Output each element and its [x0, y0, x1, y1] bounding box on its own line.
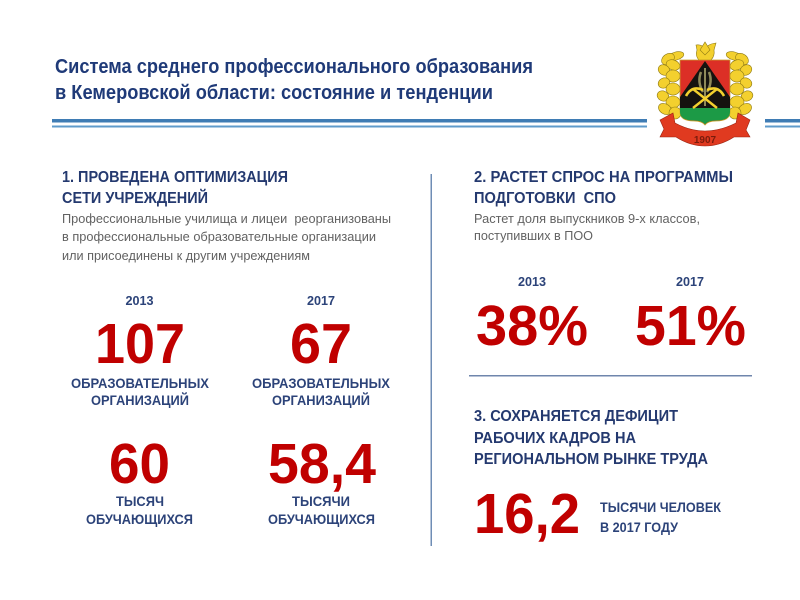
heading: section 1	[62, 169, 288, 207]
stat: 2013 organizations: 107	[95, 312, 185, 376]
stat: 2013 organizations: ОРГАНИЗАЦИЙ	[91, 391, 189, 408]
divider: horizontal	[469, 375, 752, 376]
icon: wheat crown	[696, 42, 716, 60]
text block: section 2 description: Растет доля выпускников 9-х классов,	[474, 211, 700, 226]
stat: 2013 students: 60	[109, 432, 170, 496]
heading: section 2	[474, 169, 733, 207]
stat: 2017 organizations: 2017	[307, 293, 335, 308]
stat: 2017 share: 51%	[635, 294, 746, 358]
text block: section 1 description: Профессиональные училища и лицеи реорганизованы	[62, 211, 391, 226]
title: в Кемеровской области: состояние и тенденции	[55, 82, 493, 104]
heading: section 1: 1. ПРОВЕДЕНА ОПТИМИЗАЦИЯ	[62, 169, 288, 186]
heading: section 3: РЕГИОНАЛЬНОМ РЫНКЕ ТРУДА	[474, 451, 708, 468]
stat: 2013 students: ТЫСЯЧ	[116, 493, 164, 509]
stat: 2013 organizations: 2013	[126, 293, 154, 308]
panel: workforce shortage	[474, 408, 721, 546]
stat: 2017 students: 58,4	[268, 432, 376, 496]
icon: coat of arms of Kemerovo region	[655, 42, 755, 146]
icon: left wreath	[655, 50, 685, 119]
heading: section 1: СЕТИ УЧРЕЖДЕНИЙ	[62, 189, 208, 207]
stat: 2017 students	[268, 432, 376, 527]
heading: section 2: ПОДГОТОВКИ СПО	[474, 190, 616, 207]
title: Система среднего профессионального образования	[55, 56, 533, 78]
label: shortage unit: ТЫСЯЧИ ЧЕЛОВЕК	[600, 499, 721, 515]
heading: section 3	[474, 408, 708, 468]
stat: shortage value: 16,2	[474, 482, 580, 546]
stat: 2017 organizations: 67	[290, 312, 352, 376]
title	[55, 56, 533, 104]
label: shortage unit	[600, 499, 721, 535]
panel: optimization of institutions	[62, 169, 391, 527]
icon: shield	[680, 60, 730, 125]
stat: 2017 students: ТЫСЯЧИ	[292, 493, 350, 509]
text block: section 2 description: поступивших в ПОО	[474, 228, 593, 243]
heading: section 3: 3. СОХРАНЯЕТСЯ ДЕФИЦИТ	[474, 408, 678, 425]
stat: 2013 share: 2013	[518, 274, 546, 289]
stat: 2017 share: 2017	[676, 274, 704, 289]
panel: growing demand	[474, 169, 746, 358]
heading: section 3: РАБОЧИХ КАДРОВ НА	[474, 430, 636, 447]
icon: right wreath	[725, 50, 755, 119]
divider: vertical	[430, 174, 432, 546]
stat: 2017 organizations: ОРГАНИЗАЦИЙ	[272, 391, 370, 408]
stat: 2017 organizations: ОБРАЗОВАТЕЛЬНЫХ	[252, 375, 391, 391]
stat: 2013 organizations	[71, 293, 210, 408]
stat: 2013 organizations: ОБРАЗОВАТЕЛЬНЫХ	[71, 375, 210, 391]
stat: 2017 students: ОБУЧАЮЩИХСЯ	[268, 511, 375, 527]
icon: ribbon: 1907	[694, 135, 717, 146]
text block: section 1 description: или присоединены к другим учреждениям	[62, 248, 310, 263]
text block: section 2 description	[474, 211, 700, 243]
heading: section 2: 2. РАСТЕТ СПРОС НА ПРОГРАММЫ	[474, 169, 733, 186]
stat: 2013 students: ОБУЧАЮЩИХСЯ	[86, 511, 193, 527]
text block: section 1 description: в профессиональные образовательные организации	[62, 229, 376, 244]
stat: 2013 share: 38%	[476, 294, 588, 358]
stat: 2017 organizations	[252, 293, 391, 408]
label: shortage unit: В 2017 ГОДУ	[600, 519, 678, 535]
stat: 2013 students	[86, 432, 193, 527]
text block: section 1 description	[62, 211, 391, 263]
